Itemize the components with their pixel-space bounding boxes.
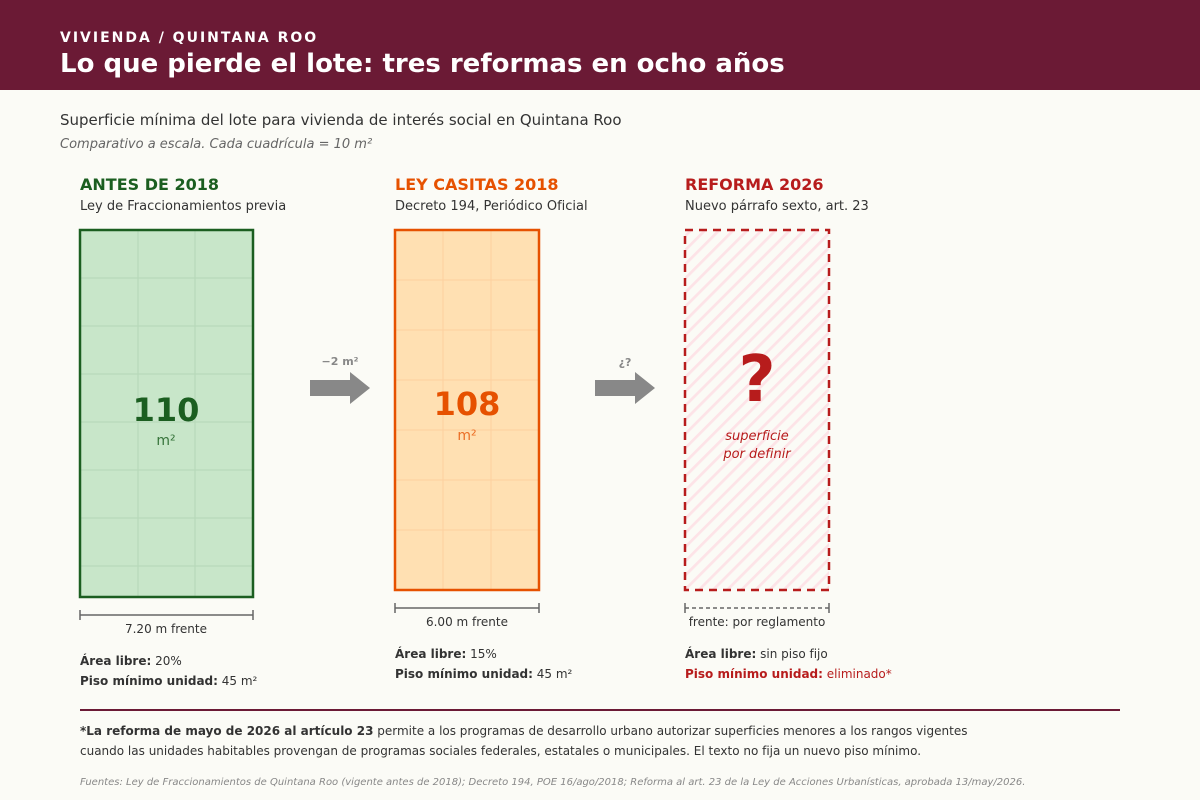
footnote [80,724,967,758]
lot data: Área libre: sin piso fijo [685,646,828,661]
frontage dimension: por reglamento: frente: por reglamento [689,615,825,629]
frontage dimension: 7.20 m: 7.20 m frente [125,622,207,636]
panel: antes de 2018: Ley de Fraccionamientos previa [80,199,286,214]
lot rectangle: undefined: por definir [722,447,792,462]
panel: ley casitas 2018: LEY CASITAS 2018 [395,175,559,194]
lot data: Área libre: 20% [80,653,182,668]
lot rectangle: 108 m²: 108 [434,385,500,423]
panel: ley casitas 2018 [395,175,588,681]
header banner: VIVIENDA / QUINTANA ROO [60,30,318,46]
lot rectangle: 108 m² [395,230,539,590]
subtitle: Superficie mínima del lote para vivienda de interés social en Quintana Roo [60,111,622,129]
lot data [395,646,573,681]
frontage dimension: 6.00 m [395,603,539,629]
frontage dimension: por reglamento [685,603,829,629]
panel: ley casitas 2018: Decreto 194, Periódico Oficial [395,199,588,214]
lot rectangle: undefined [685,230,829,590]
sources: Fuentes: Ley de Fraccionamientos de Quintana Roo (vigente antes de 2018); Decreto 194, POE 16/ago/2018; Reforma al art. 23 de la Ley de Acciones Urbanísticas, aprobada 13/may/2026. [80,776,1025,788]
lot data: Piso mínimo unidad: eliminado* [685,667,892,681]
lot rectangle: 108 m²: m² [457,428,477,444]
frontage dimension: 7.20 m [80,610,253,636]
lot rectangle: undefined: ? [738,343,776,417]
panel: reforma 2026: REFORMA 2026 [685,175,824,194]
panel: antes de 2018: ANTES DE 2018 [80,175,219,194]
lot data [80,653,258,688]
lot data: Piso mínimo unidad: 45 m² [80,674,258,688]
lot data: Piso mínimo unidad: 45 m² [395,667,573,681]
arrow: unknown change [595,356,655,404]
footnote: cuando las unidades habitables provengan de programas sociales federales, estatales o municipales. El texto no fija un nuevo piso mínimo. [80,744,921,758]
arrow: minus 2 m²: −2 m² [322,355,359,368]
lot rectangle: undefined: superficie [725,429,789,444]
lot rectangle: 110 m²: m² [156,433,176,449]
header banner: Lo que pierde el lote: tres reformas en ocho años [60,49,785,79]
panel: reforma 2026: Nuevo párrafo sexto, art. 23 [685,199,869,214]
lot rectangle: 110 m² [80,230,253,597]
scale note: Comparativo a escala. Cada cuadrícula = 10 m² [60,137,372,152]
lot data [685,646,892,681]
arrow: unknown change: ¿? [619,356,631,369]
frontage dimension: 6.00 m: 6.00 m frente [426,615,508,629]
lot data: Área libre: 15% [395,646,497,661]
panel: reforma 2026 [685,175,892,681]
lot rectangle: 110 m²: 110 [133,391,199,429]
arrow: minus 2 m² [310,355,370,404]
footnote: *La reforma de mayo de 2026 al artículo 23 permite a los programas de desarrollo urbano autorizar superficies menores a los rangos vigentes [80,724,967,738]
panel: antes de 2018 [80,175,286,688]
header banner [0,0,1200,90]
